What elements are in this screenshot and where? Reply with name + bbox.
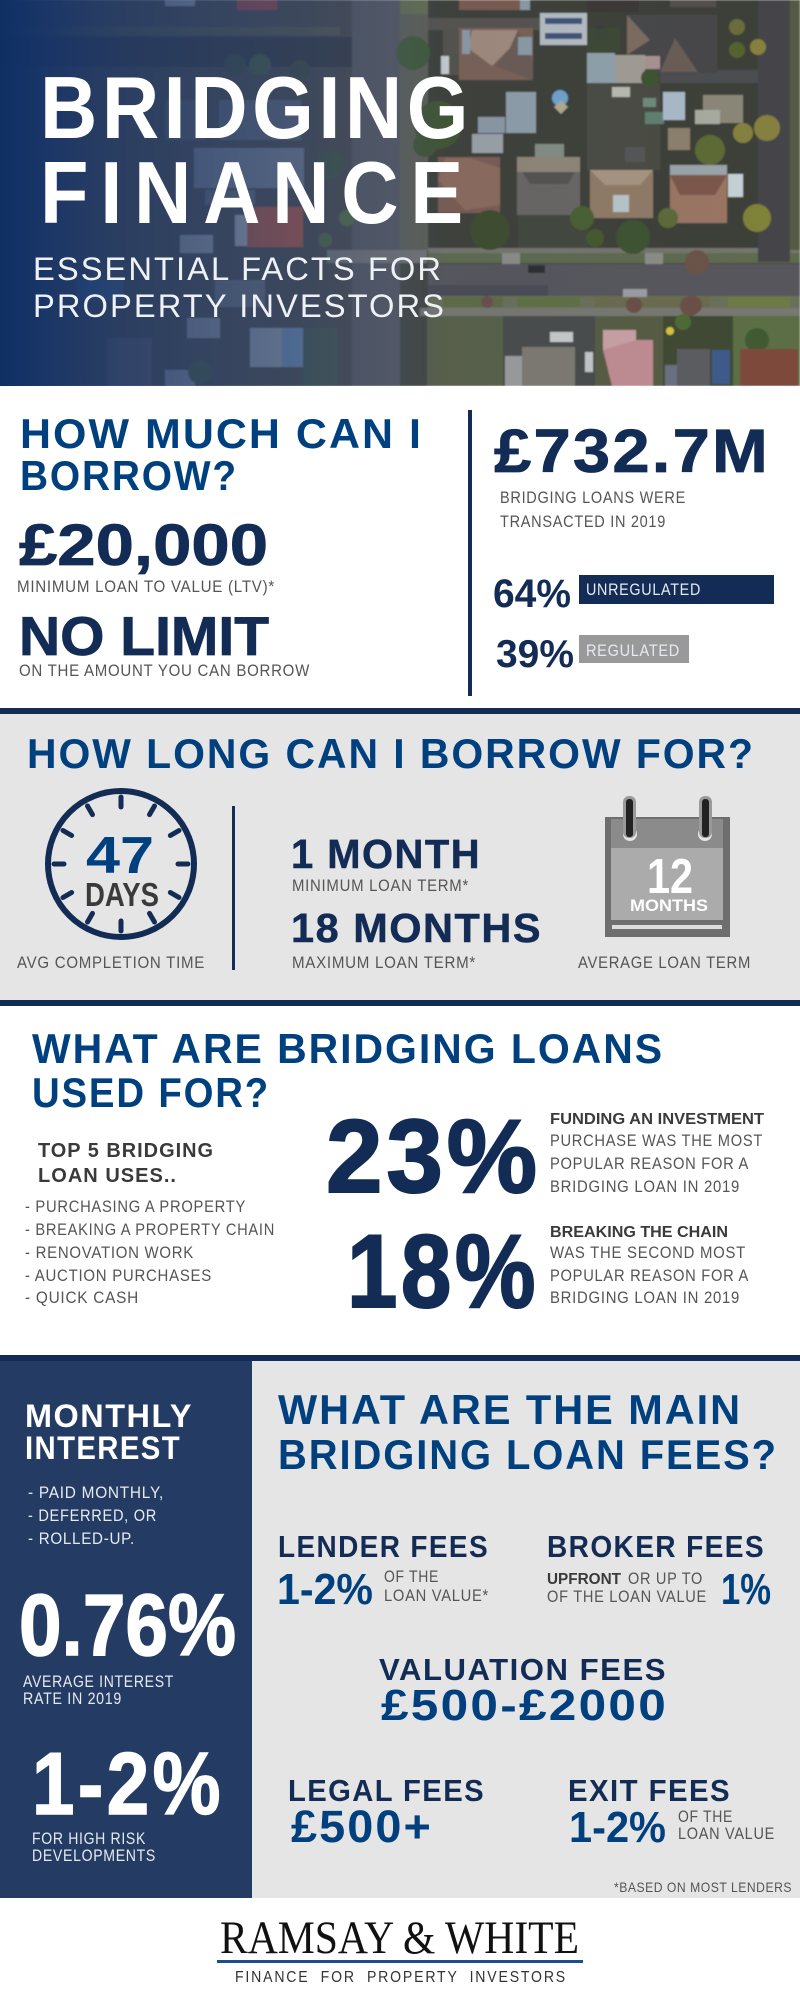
minimum loan stat bbox=[17, 513, 275, 596]
exit fees: EXIT FEES bbox=[568, 1773, 731, 1808]
broker fees: OR UP TO bbox=[628, 1570, 703, 1588]
stat: 23% funding an investment: FUNDING AN INVESTMENT bbox=[550, 1111, 764, 1128]
minimum term stat: 1 MONTH bbox=[291, 831, 481, 877]
stat: 0.76%: AVERAGE INTEREST bbox=[23, 1673, 174, 1691]
heading: WHAT ARE BRIDGING LOANS bbox=[32, 1025, 664, 1072]
stat: 23% funding an investment: 23% bbox=[326, 1099, 541, 1215]
valuation fees bbox=[379, 1652, 668, 1730]
heading bbox=[32, 1025, 664, 1116]
heading: HOW LONG CAN I BORROW FOR? bbox=[27, 730, 755, 777]
lender fees: OF THE bbox=[384, 1568, 439, 1586]
panel: main bridging loan fees bbox=[252, 1361, 800, 1898]
lender fees bbox=[277, 1529, 489, 1614]
minimum loan stat: £20,000 bbox=[19, 513, 268, 578]
heading bbox=[25, 1398, 193, 1466]
lender fees: 1-2% bbox=[277, 1565, 373, 1614]
top 5 list bbox=[25, 1140, 275, 1307]
top 5 list: - RENOVATION WORK bbox=[25, 1244, 194, 1262]
lender fees: LOAN VALUE* bbox=[384, 1587, 489, 1605]
top 5 list: TOP 5 BRIDGING bbox=[38, 1140, 214, 1162]
panel: what are bridging loans used for bbox=[0, 1006, 800, 1355]
bar: regulated 39% bbox=[496, 633, 689, 676]
icon: calendar 12 months: MONTHS bbox=[630, 896, 708, 915]
no limit stat bbox=[19, 605, 310, 680]
heading: HOW MUCH CAN I bbox=[20, 410, 423, 457]
panel: monthly interest bbox=[0, 1361, 252, 1898]
legal fees: LEGAL FEES bbox=[288, 1773, 485, 1808]
maximum term stat bbox=[291, 905, 542, 972]
broker fees: OF THE LOAN VALUE bbox=[547, 1588, 707, 1606]
total transacted stat bbox=[494, 417, 770, 531]
maximum term stat: 18 MONTHS bbox=[291, 905, 542, 951]
heading bbox=[20, 410, 423, 499]
stat: 0.76%: 0.76% bbox=[19, 1577, 236, 1674]
heading: INTEREST bbox=[25, 1430, 181, 1466]
heading: BORROW? bbox=[20, 452, 238, 499]
icon: clock 47 days bbox=[48, 791, 194, 937]
stat: 1-2%: 1-2% bbox=[32, 1734, 224, 1833]
right vertical road bbox=[758, 0, 790, 262]
heading: MONTHLY bbox=[25, 1398, 193, 1434]
payment options: - ROLLED-UP. bbox=[28, 1530, 135, 1548]
label: avg completion time: AVG COMPLETION TIME bbox=[17, 954, 205, 972]
legal fees: £500+ bbox=[291, 1801, 433, 1852]
heading: WHAT ARE THE MAIN bbox=[278, 1386, 742, 1433]
bar: unregulated 64%: UNREGULATED bbox=[586, 581, 701, 599]
stat: 18% breaking the chain: BREAKING THE CHAIN bbox=[550, 1224, 728, 1241]
panel: how much can I borrow bbox=[0, 386, 800, 708]
exit fees: OF THE bbox=[678, 1808, 733, 1826]
subtitle bbox=[33, 251, 446, 324]
logo: Ramsay & White bbox=[217, 1912, 583, 1986]
no limit stat: NO LIMIT bbox=[19, 605, 269, 667]
lender fees: LENDER FEES bbox=[278, 1529, 489, 1564]
stat: 0.76%: RATE IN 2019 bbox=[23, 1690, 122, 1708]
stat: 1-2% bbox=[32, 1734, 224, 1865]
broker fees: 1% bbox=[721, 1565, 771, 1614]
stat: 0.76% bbox=[19, 1577, 236, 1708]
total transacted stat: BRIDGING LOANS WERE bbox=[500, 489, 686, 507]
bar: regulated 39%: REGULATED bbox=[586, 642, 680, 660]
valuation fees: £500-£2000 bbox=[381, 1681, 668, 1730]
broker fees: UPFRONT bbox=[547, 1571, 621, 1588]
title: FINANCE bbox=[40, 143, 475, 242]
stat: 23% funding an investment bbox=[326, 1099, 764, 1215]
yards bbox=[428, 0, 758, 250]
icon: clock 47 days: 47 bbox=[86, 827, 154, 885]
navy gradient overlay bbox=[0, 0, 800, 386]
cars and lower houses bbox=[441, 56, 449, 74]
top 5 list: - QUICK CASH bbox=[25, 1289, 139, 1307]
stat: 1-2%: DEVELOPMENTS bbox=[32, 1847, 156, 1865]
subtitle: ESSENTIAL FACTS FOR bbox=[33, 251, 443, 287]
maximum term stat: MAXIMUM LOAN TERM* bbox=[292, 954, 476, 972]
valuation fees: VALUATION FEES bbox=[379, 1652, 667, 1687]
payment options bbox=[28, 1484, 164, 1548]
panel: how long can I borrow bbox=[0, 714, 800, 1000]
heading bbox=[278, 1386, 778, 1478]
legal fees bbox=[288, 1773, 485, 1852]
stat: 23% funding an investment: POPULAR REASON FOR A bbox=[550, 1155, 749, 1173]
icon: calendar 12 months: 12 bbox=[647, 850, 693, 904]
right side houses bbox=[459, 28, 533, 80]
exit fees: 1-2% bbox=[569, 1803, 666, 1852]
subtitle: PROPERTY INVESTORS bbox=[33, 288, 446, 324]
exit fees bbox=[568, 1773, 775, 1852]
title bbox=[40, 58, 475, 242]
total transacted stat: TRANSACTED IN 2019 bbox=[500, 513, 666, 531]
logo: Ramsay & White: FINANCE FOR PROPERTY INVESTORS bbox=[235, 1969, 567, 1986]
no limit stat: ON THE AMOUNT YOU CAN BORROW bbox=[19, 662, 310, 680]
bar: unregulated 64% bbox=[493, 572, 774, 616]
payment options: - PAID MONTHLY, bbox=[28, 1484, 164, 1502]
stat: 18% breaking the chain: POPULAR REASON FOR A bbox=[550, 1267, 749, 1285]
icon: calendar 12 months bbox=[605, 796, 730, 937]
icon: clock 47 days: DAYS bbox=[85, 876, 159, 913]
top 5 list: - BREAKING A PROPERTY CHAIN bbox=[25, 1221, 275, 1239]
top 5 list: - AUCTION PURCHASES bbox=[25, 1267, 212, 1285]
title: BRIDGING bbox=[40, 58, 473, 157]
top 5 list: - PURCHASING A PROPERTY bbox=[25, 1198, 246, 1216]
stat: 18% breaking the chain: BRIDGING LOAN IN 2019 bbox=[550, 1289, 740, 1307]
heading: BRIDGING LOAN FEES? bbox=[278, 1431, 778, 1478]
left side houses bbox=[194, 148, 304, 188]
hero banner bbox=[0, 0, 800, 386]
stat: 1-2%: FOR HIGH RISK bbox=[32, 1830, 146, 1848]
stat: 18% breaking the chain: WAS THE SECOND MOST bbox=[550, 1244, 746, 1262]
aerial photo of suburban street bbox=[0, 0, 800, 386]
stat: 23% funding an investment: PURCHASE WAS THE MOST bbox=[550, 1132, 763, 1150]
label: average loan term: AVERAGE LOAN TERM bbox=[578, 954, 751, 972]
broker fees: BROKER FEES bbox=[547, 1529, 765, 1564]
heading: USED FOR? bbox=[32, 1069, 270, 1116]
broker fees bbox=[547, 1529, 771, 1614]
payment options: - DEFERRED, OR bbox=[28, 1507, 157, 1525]
minimum loan stat: MINIMUM LOAN TO VALUE (LTV)* bbox=[17, 578, 275, 596]
exit fees: LOAN VALUE bbox=[678, 1825, 775, 1843]
bar: unregulated 64%: 64% bbox=[493, 572, 571, 616]
logo: Ramsay & White: RAMSAY & WHITE bbox=[220, 1912, 579, 1964]
stat: 18% breaking the chain: 18% bbox=[347, 1214, 539, 1330]
minimum term stat: MINIMUM LOAN TERM* bbox=[292, 877, 469, 895]
bar: regulated 39%: 39% bbox=[496, 633, 574, 676]
top 5 list: LOAN USES.. bbox=[38, 1165, 177, 1187]
stat: 18% breaking the chain bbox=[347, 1214, 749, 1330]
stat: 23% funding an investment: BRIDGING LOAN IN 2019 bbox=[550, 1178, 740, 1196]
total transacted stat: £732.7M bbox=[494, 417, 770, 485]
